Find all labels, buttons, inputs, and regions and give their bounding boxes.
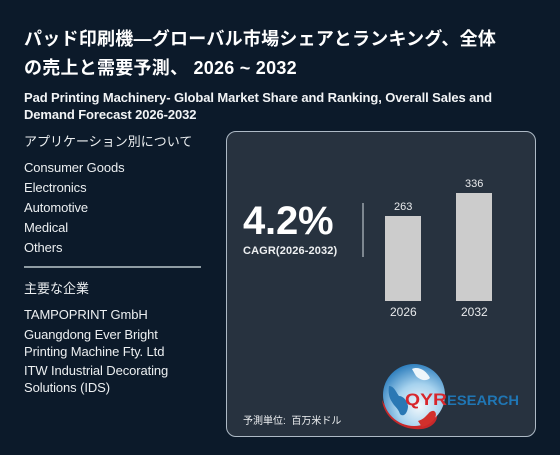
company: guangdong ever bright: Printing Machine Fty. Ltd: [24, 344, 164, 358]
bar chart: [385, 178, 492, 319]
panel: market summary: [226, 131, 536, 437]
value 2026: 263: [394, 201, 412, 213]
subtitle: [24, 90, 492, 122]
application: automotive: Automotive: [24, 200, 88, 215]
heading: applications: アプリケーション別について: [24, 134, 192, 149]
label 2026: 2026: [390, 305, 417, 319]
company: itw: [24, 363, 168, 394]
CAGR label: CAGR(2026-2032): [243, 245, 337, 257]
logo: QYResearch: ESEARCH: [447, 392, 519, 408]
company: guangdong ever bright: [24, 327, 164, 358]
application: medical: Medical: [24, 220, 68, 235]
title: [24, 29, 496, 78]
title: の売上と需要予測、 2026 ~ 2032: [24, 58, 297, 78]
heading: key companies: 主要な企業: [24, 281, 89, 296]
list: companies: [24, 307, 168, 394]
forecast unit note: 予測単位: 百万米ドル: [243, 416, 341, 427]
label 2032: 2032: [461, 305, 488, 319]
subtitle: Pad Printing Machinery- Global Market Share and Ranking, Overall Sales and: [24, 90, 492, 105]
value 2032: 336: [465, 178, 483, 190]
company: itw: ITW Industrial Decorating: [24, 363, 168, 378]
application: others: Others: [24, 240, 62, 255]
CAGR value: 4.2%: [243, 199, 333, 243]
company: guangdong ever bright: Guangdong Ever Bright: [24, 327, 158, 342]
title: パッド印刷機—グローバル市場シェアとランキング、全体: [24, 29, 496, 49]
bar 2032: [456, 193, 492, 301]
globe: [382, 364, 445, 429]
list: applications: [24, 160, 124, 255]
application: consumer goods: Consumer Goods: [24, 160, 124, 175]
logo text: QYR: [405, 390, 447, 409]
bar 2026: [385, 216, 421, 301]
subtitle: Demand Forecast 2026-2032: [24, 106, 196, 122]
logo: QYResearch: [382, 364, 519, 430]
company: itw: Solutions (IDS): [24, 380, 110, 394]
company: tampoprint: TAMPOPRINT GmbH: [24, 307, 148, 322]
application: electronics: Electronics: [24, 180, 86, 195]
